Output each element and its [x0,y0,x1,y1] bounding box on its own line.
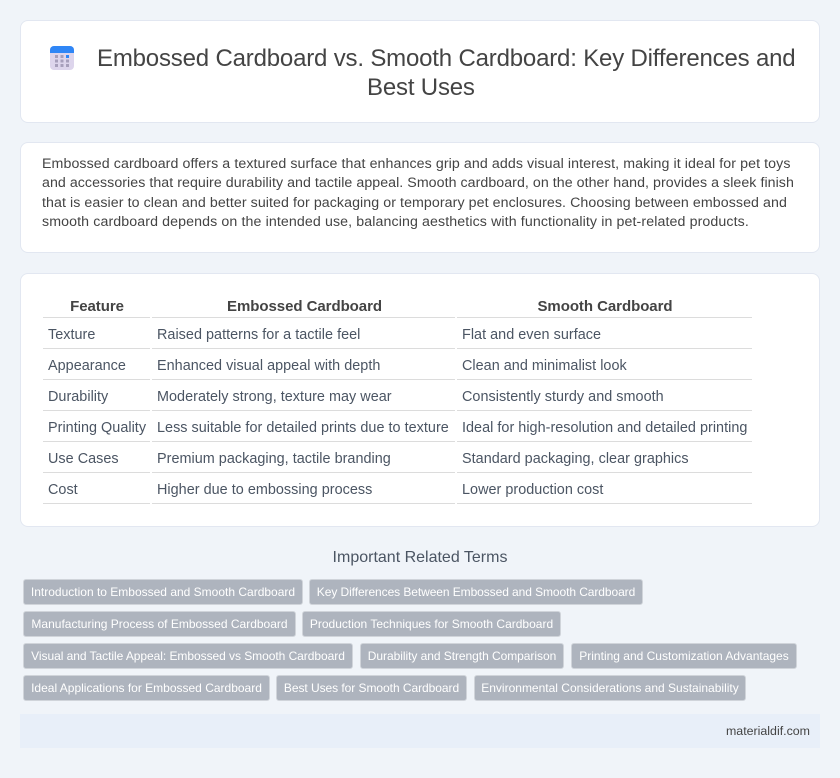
row: Texture: Texture [48,327,95,343]
intro text: and accessories that require durability and tactile appeal. Smooth cardboard, on the other hand, provides a sleek finish [42,175,794,191]
tag [276,675,467,701]
tag [23,579,303,605]
icon: calendar [50,46,74,70]
title: Embossed Cardboard vs. Smooth Cardboard: Key Differences and [97,45,795,72]
header: Embossed Cardboard: Embossed Cardboard [227,298,382,315]
tag [309,579,643,605]
footer source text: materialdif.com [726,724,810,738]
tag: Durability and Strength Comparison [368,649,556,663]
tag [23,675,270,701]
row: Durability [48,389,664,405]
title [97,45,795,101]
tag: Environmental Considerations and Sustainability [481,681,739,695]
row: Appearance [48,358,627,374]
panel: comparison table [20,273,820,527]
panel: title card [20,20,820,123]
tag [302,611,561,637]
intro text [42,156,794,230]
tag: Best Uses for Smooth Cardboard [284,681,459,695]
row: Use Cases: Premium packaging, tactile branding [157,451,391,467]
intro text: Embossed cardboard offers a textured surface that enhances grip and adds visual interest, making it ideal for pet toys [42,156,791,172]
row: Appearance: Clean and minimalist look [462,358,627,374]
comparison table [43,298,752,504]
tag [23,611,296,637]
row: Texture: Flat and even surface [462,327,601,343]
row: Printing Quality: Ideal for high-resolution and detailed printing [462,420,747,436]
header: Smooth Cardboard: Smooth Cardboard [537,298,673,315]
tag: Manufacturing Process of Embossed Cardboard [31,617,288,631]
row: Cost: Higher due to embossing process [157,482,372,498]
tag: Key Differences Between Embossed and Smooth Cardboard [317,585,635,599]
panel: intro paragraph [20,142,820,253]
row: Printing Quality: Printing Quality [48,420,146,436]
row: Use Cases [48,451,689,467]
row: Texture [48,327,601,343]
tag: Ideal Applications for Embossed Cardboard [31,681,262,695]
row: Durability: Durability [48,389,108,405]
row: Use Cases: Use Cases [48,451,119,467]
tag [23,643,353,669]
row: Use Cases: Standard packaging, clear graphics [462,451,689,467]
intro text: smooth cardboard depends on the intended use, balancing aesthetics with functionality in pet-related products. [42,214,749,230]
row: Appearance: Appearance [48,358,126,374]
row: Texture: Raised patterns for a tactile feel [157,327,360,343]
related term tags [23,579,797,701]
tag: Visual and Tactile Appeal: Embossed vs Smooth Cardboard [31,649,345,663]
title: Best Uses [367,74,475,101]
header: Feature: Feature [70,298,124,315]
tag: Printing and Customization Advantages [579,649,789,663]
row: Durability: Moderately strong, texture may wear [157,389,392,405]
row: Cost: Cost [48,482,78,498]
heading: Important Related Terms: Important Related Terms [333,548,507,566]
row: Appearance: Enhanced visual appeal with depth [157,358,380,374]
row: Cost: Lower production cost [462,482,603,498]
tag [474,675,746,701]
tag: Production Techniques for Smooth Cardboard [310,617,553,631]
row: Printing Quality [48,420,747,436]
footer bar [20,714,820,748]
row: Cost [48,482,604,498]
tag: Introduction to Embossed and Smooth Cardboard [31,585,295,599]
tag [360,643,564,669]
intro text: that is easier to clean and better suited for packaging or temporary pet enclosures. Choosing between embossed and [42,195,787,211]
row: Printing Quality: Less suitable for detailed prints due to texture [157,420,449,436]
row: Durability: Consistently sturdy and smooth [462,389,664,405]
tag [571,643,797,669]
